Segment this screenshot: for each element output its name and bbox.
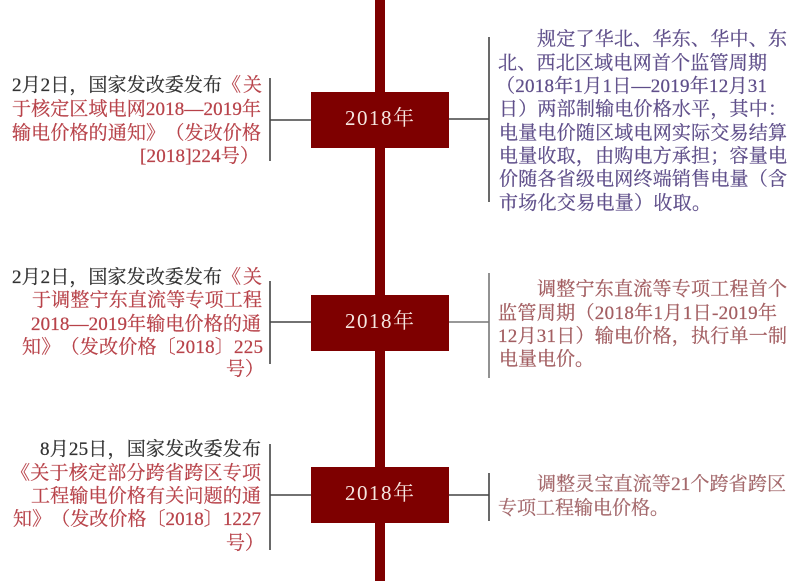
entry 3 left text: 8月25日，国家发改委发布	[40, 438, 261, 460]
entry 3 right text	[498, 473, 786, 519]
entry 1 right text: 电量收取，由购电方承担；容量电	[499, 145, 787, 167]
entry 3 year box: 2018年	[345, 481, 414, 505]
entry 1 right text: 北、西北区域电网首个监管周期	[498, 52, 767, 74]
entry 1 left text: 2月2日，国家发改委发布	[12, 74, 222, 96]
entry 2 left text: 《关	[222, 266, 262, 288]
entry 3 right bracket	[449, 473, 489, 521]
timeline spine	[375, 0, 385, 581]
entry 3 right text: 专项工程输电价格。	[498, 497, 669, 519]
entry 1 right text: （2018年1月1日—2019年12月31	[496, 75, 767, 97]
entry 2 right text: 12月31日）输电价格，执行单一制	[498, 325, 787, 347]
entry 1 left text: 输电价格的通知》（发改价格	[12, 122, 261, 144]
entry 2 left text: 号）	[226, 358, 264, 380]
entry 3	[11, 438, 786, 554]
entry 1 year box: 2018年	[345, 106, 414, 130]
entry 2 right text: 调整宁东直流等专项工程首个	[537, 278, 787, 300]
entry 2 left text: 知》（发改价格〔2018〕225	[22, 336, 263, 358]
entry 3 left text	[11, 438, 264, 554]
entry 1 right text: 规定了华北、华东、华中、东	[537, 28, 787, 50]
entry 3 left bracket	[270, 444, 311, 550]
entry 2 year box: 2018年	[345, 309, 414, 333]
entry 1 right text: 日）两部制输电价格水平，其中：	[499, 98, 787, 120]
entry 1 right bracket	[449, 37, 489, 202]
entry 2 left bracket	[270, 281, 311, 364]
entry 1 left bracket	[270, 78, 311, 161]
entry 1 right text: 价随各省级电网终端销售电量（含	[499, 168, 787, 190]
entry 1 left text: 于核定区域电网2018—2019年	[12, 98, 261, 120]
entry 2 left text	[12, 266, 264, 380]
entry 1 right text: 电量电价随区域电网实际交易结算	[499, 122, 787, 144]
entry 2	[12, 266, 787, 380]
entry 3 left text: 号）	[226, 532, 264, 554]
entry 1 right text: 市场化交易电量）收取。	[499, 192, 711, 214]
entry 2 left text: 于调整宁东直流等专项工程	[32, 289, 262, 311]
entry 2 right text: 电量电价。	[499, 348, 594, 370]
entry 2 right bracket	[449, 273, 489, 378]
entry 1 right text	[496, 28, 787, 214]
entry 2 left text: 2月2日，国家发改委发布	[12, 266, 222, 288]
entry 3 right text: 调整灵宝直流等21个跨省跨区	[537, 473, 786, 495]
entry 1 left text: 《关	[222, 74, 262, 96]
entry 3 year box	[311, 467, 449, 523]
entry 3 left text: 知》（发改价格〔2018〕1227	[13, 508, 261, 530]
entry 3 left text: 《关于核定部分跨省跨区专项	[11, 462, 262, 484]
entry 1 left text	[12, 74, 262, 167]
entry 1 left text: [2018]224号）	[140, 145, 259, 167]
entry 1	[12, 28, 787, 214]
entry 2 right text	[498, 278, 787, 370]
entry 1 year box	[311, 92, 449, 148]
entry 2 year box	[311, 295, 449, 351]
entry 2 right text: 监管周期（2018年1月1日-2019年	[498, 302, 777, 324]
entry 3 left text: 工程输电价格有关问题的通	[31, 485, 261, 507]
entry 2 left text: 2018—2019年输电价格的通	[31, 313, 261, 335]
